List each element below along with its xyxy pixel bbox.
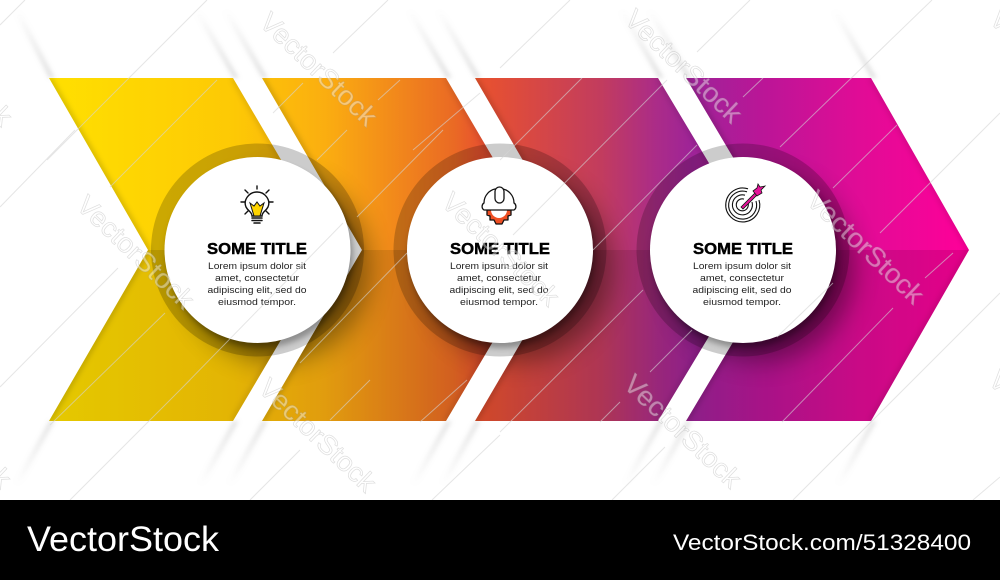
body text: Lorem ipsum dolor sit [208,261,306,272]
watermarks: VectorStock [801,185,930,310]
title: SOME TITLE [207,241,307,258]
icon: target with arrow [726,184,765,222]
watermarks: VectorStock [71,190,200,315]
body text: eiusmod tempor. [460,297,538,308]
body text: amet, consectetur [457,273,541,284]
body text [208,261,306,308]
arrow 3 [475,78,761,421]
icon: light bulb [241,186,273,223]
body text [692,261,792,308]
arrow 2 [262,78,547,421]
watermarks: VectorStock [436,187,565,312]
footer URL: VectorStock.com/51328400 [673,530,971,555]
body text: Lorem ipsum dolor sit [693,261,791,272]
panel: step 1 [164,157,350,343]
arrow 4 [686,78,969,421]
circle rings [151,144,850,356]
watermarks: VectorStock [253,373,382,498]
title: SOME TITLE [450,241,550,258]
body text [450,261,548,308]
body text: eiusmod tempor. [703,297,781,308]
title: SOME TITLE [693,241,793,258]
body text: adipiscing elit, sed do [450,285,548,296]
footer bar [0,500,1000,580]
watermarks: VectorStock [254,7,383,132]
circle contact shadows [167,162,838,348]
watermarks: VectorStock [618,369,747,494]
body text: eiusmod tempor. [218,297,296,308]
watermarks: VectorStock [619,4,748,129]
body text: amet, consectetur [215,273,299,284]
panel: step 3 [650,157,836,343]
arrow shading [40,78,980,422]
icon: helmet and gear [482,187,516,224]
footer logo: VectorStock [27,520,220,559]
panel: step 2 [407,157,593,343]
body text: amet, consectetur [700,273,784,284]
body text: Lorem ipsum dolor sit [450,261,548,272]
soft streak shadows outside arrows [13,10,877,485]
arrow chevrons [49,78,969,421]
body text: adipiscing elit, sed do [208,285,306,296]
body text: adipiscing elit, sed do [692,285,792,296]
arrow 1 [49,78,334,421]
